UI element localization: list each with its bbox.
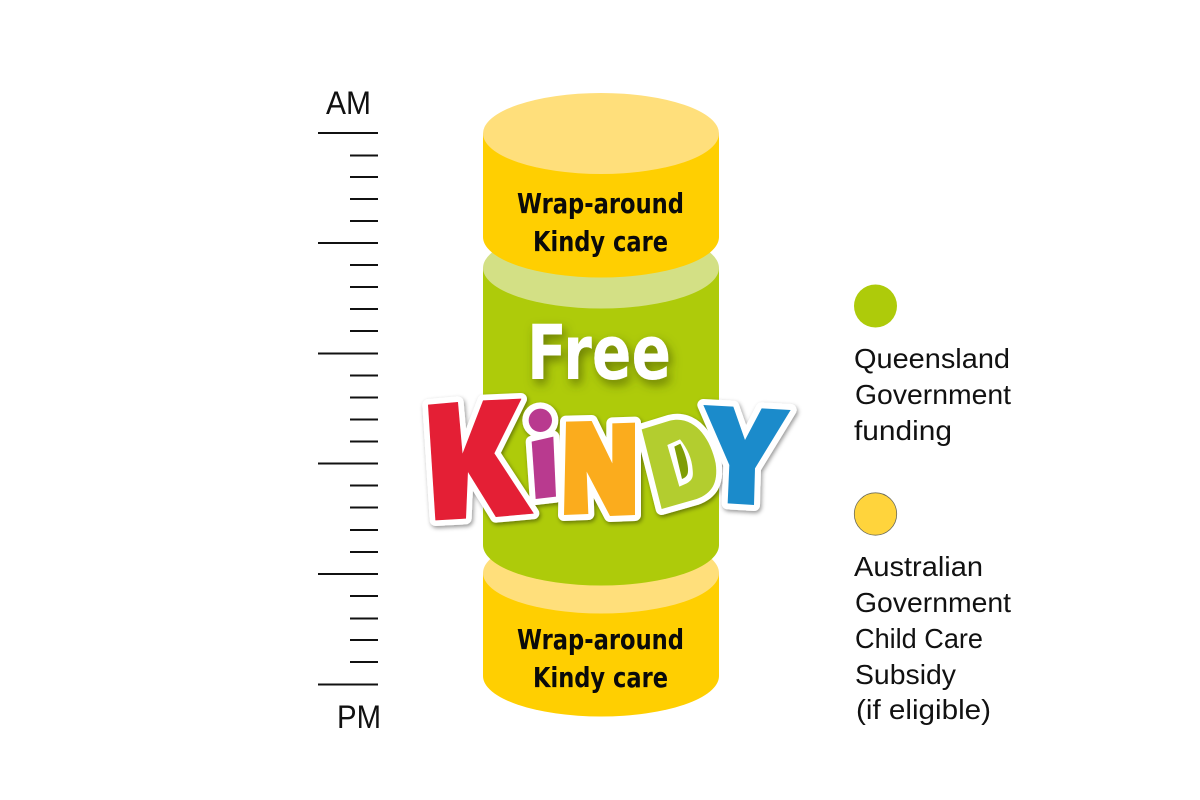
- ruler ticks: [318, 133, 378, 684]
- time scale: [318, 85, 381, 735]
- cylinder: top wrap-around care: [483, 93, 719, 278]
- cylinder: green free kindy: [483, 228, 719, 586]
- legend: Australian Government Child Care Subsidy: [854, 493, 1011, 725]
- label: bottom wrap-around: Kindy care: [533, 661, 668, 694]
- legend text: Child Care: [855, 623, 983, 654]
- cylinder: bottom wrap-around care: [483, 532, 719, 716]
- swatch: green: [854, 284, 897, 328]
- label: top wrap-around: Wrap-around: [517, 187, 684, 220]
- label: bottom wrap-around: Wrap-around: [517, 623, 684, 656]
- letter N: [564, 421, 635, 516]
- heading: Free: Free: [527, 308, 671, 397]
- letter K: [428, 399, 533, 520]
- label: PM: PM: [337, 699, 381, 735]
- letter Y: [703, 405, 791, 505]
- legend: Queensland Government funding: [854, 284, 1011, 446]
- letter D: [642, 420, 716, 509]
- legend text: Subsidy: [855, 659, 956, 690]
- legend text: funding: [854, 415, 952, 446]
- swatch: yellow: [854, 493, 897, 535]
- label: AM: AM: [326, 85, 371, 121]
- legend text: Australian: [854, 551, 983, 582]
- logo: Kindy: [428, 399, 791, 520]
- legend text: Government: [855, 587, 1011, 618]
- legend text: Queensland: [854, 343, 1010, 374]
- legend text: (if eligible): [856, 694, 991, 725]
- legend text: Government: [855, 379, 1011, 410]
- letter i: [529, 409, 556, 499]
- label: top wrap-around: Kindy care: [533, 225, 668, 258]
- logo white outline and shadow: [428, 399, 791, 520]
